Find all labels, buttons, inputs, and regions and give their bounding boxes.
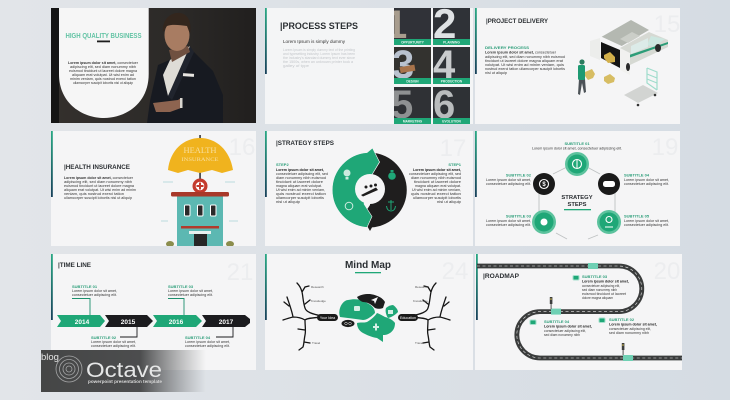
subtitle 04: [530, 319, 592, 337]
subtitle 05: consectetuer adipiscing elit.: [624, 223, 669, 227]
heading: project delivery: |PROJECT DELIVERY: [486, 18, 549, 25]
node 2: [533, 173, 555, 195]
subtitle 04: [185, 335, 230, 348]
panel: strategy steps (hexagon): [475, 131, 680, 246]
step tile 1: 1: [385, 3, 407, 47]
text block: step 1: Ut wisi enim ad minim veniam,: [412, 188, 461, 192]
subtitle 02: sed diam nonummy nibh: [609, 331, 649, 335]
text block: step 1: diam nonummy nibh euismod: [411, 176, 461, 180]
text block: intro: ullamcorper suscipit lobortis nisl ut aliquip: [73, 81, 133, 85]
center label: [561, 195, 593, 210]
node 3: [598, 173, 620, 195]
text block: health intro: veniam, quis nostrud exerci tation: [64, 192, 124, 196]
step tile 6: EVOLUTION: [442, 120, 461, 124]
accent bar: [265, 8, 267, 74]
left tree: Research: [311, 285, 324, 289]
heading: process steps: |PROCESS STEPS: [280, 21, 358, 31]
subtitle 01: [72, 284, 117, 297]
subtitle 03: Lorem ipsum dolor sit amet,: [486, 219, 531, 223]
step tile 1: OPPURTUNITY: [401, 40, 425, 44]
text block: intro: aliquam erat volutpat. Ut wisi enim ad: [72, 73, 134, 77]
subtitle 02: consectetuer adipiscing elit.: [91, 344, 136, 348]
panel: mind map: [265, 254, 473, 370]
text block: intro: euismod tincidunt ut laoreet dolore magna: [69, 69, 138, 73]
text block: step 2: diam nonummy nibh euismod: [276, 176, 326, 180]
subtitle 01: Lorem ipsum dolor sit amet, consectetuer adipiscing elit.: [532, 146, 622, 150]
accent bar: [475, 8, 477, 74]
slide number 20: 20: [654, 258, 680, 285]
text block: step 2: STEP2: [276, 162, 289, 167]
text block: step 2: tincidunt ut laoreet dolore: [276, 180, 323, 184]
tagline: powerpoint presentation template: [88, 379, 162, 385]
step tile 2: 2: [433, 0, 456, 47]
timeline arrows: 2015: [121, 319, 136, 326]
text block: step 2: magna aliquam erat volutpat.: [276, 184, 322, 188]
panel: strategy steps (circular): [265, 131, 473, 246]
text block: delivery process: Lorem ipsum dolor sit amet, consectetuer: [485, 50, 557, 54]
accent bar: [51, 131, 53, 197]
step tile 6: [433, 87, 470, 124]
text block: process intro: Lorem Ipsum is simply dummy: [283, 39, 346, 44]
subtitle 02: Lorem ipsum dolor sit amet,: [486, 178, 531, 182]
subtitle 04: Lorem ipsum dolor sit amet,: [624, 178, 669, 182]
text block: health intro: euismod tincidunt ut laoreet dolore magna: [64, 184, 135, 188]
subtitle 03: euismod tincidunt ut laoreet: [582, 292, 626, 296]
text block: delivery process: nisl ut aliquip: [485, 71, 507, 75]
subtitle 05: [624, 214, 669, 227]
text block: intro: [68, 61, 139, 85]
text block: step 1: [409, 162, 462, 204]
accent bar: [265, 131, 267, 197]
text block: delivery process: [485, 45, 565, 75]
subtitle 03: dolore magna aliquam: [582, 296, 613, 300]
heading: mind map: Mind Map: [345, 260, 391, 271]
timeline arrows: [57, 315, 250, 327]
text block: process intro: Lorem Ipsum is simply dummy text of the printing: [283, 48, 355, 52]
illustration: umbrella: [168, 135, 233, 185]
right tree: Travel: [415, 341, 424, 345]
text block: process intro: galley of type: [283, 64, 309, 68]
left tree: [283, 283, 338, 350]
illustration: delivery van: [590, 20, 668, 75]
text block: delivery process: nostrud exerci tation ullamcorper suscipit lobortis: [485, 67, 565, 71]
panel: high quality business: [51, 8, 256, 123]
panel: project delivery: [475, 8, 680, 124]
text block: process intro: and typesetting industry. Lorem Ipsum has been: [283, 52, 355, 56]
heading: health insurance: |HEALTH INSURANCE: [64, 164, 131, 171]
step tile 4: PRODUCTION: [441, 80, 463, 84]
hexagon connector: [539, 167, 615, 239]
subtitle 04: Lorem ipsum dolor sit amet,: [544, 324, 592, 328]
right tree: Knowledge: [413, 299, 428, 303]
text block: step 2: ullamcorper suscipit lobortis: [276, 196, 324, 200]
text block: health intro: aliquam erat volutpat. Ut wisi enim ad minim: [64, 188, 136, 192]
illustration: umbrella: INSURANCE: [182, 157, 219, 163]
left tree: Your Idea: [320, 316, 335, 320]
subtitle 03: [573, 274, 629, 300]
text block: intro: minim veniam, quis nostrud exerci tation: [70, 77, 136, 81]
subtitle 03: sed diam nonummy nibh: [582, 288, 617, 292]
step tile 4: 4: [433, 43, 456, 87]
subtitle 04: consectetuer adipiscing elit,: [544, 329, 586, 333]
subtitle 04: Lorem ipsum dolor sit amet,: [185, 340, 230, 344]
node 1: [565, 152, 589, 176]
step tile 4: [433, 47, 470, 84]
text block: health intro: ullamcorper suscipit lobortis nisl ut aliquip: [64, 196, 132, 200]
text block: step 2: Lorem ipsum dolor sit amet,: [276, 168, 324, 172]
connector lines: [72, 298, 184, 315]
text block: step 1: tincidunt ut laoreet dolore: [414, 180, 461, 184]
icon: compass: [345, 202, 353, 210]
text block: process intro: the 1500s, when an unknown printer took a: [283, 60, 353, 64]
accent bar: [51, 254, 53, 320]
panel: process steps: [265, 0, 473, 127]
watermark: octave logo banner: [41, 350, 206, 392]
subtitle 04: [624, 172, 669, 186]
text block: step 2: consectetuer adipiscing elit, sed: [276, 172, 328, 176]
text block: health intro: adipiscing elit, sed diam nonummy nibh: [64, 180, 132, 184]
timeline arrows: 2017: [219, 319, 234, 326]
label: blog: blog: [41, 352, 59, 363]
step tile 5: [394, 87, 431, 124]
panel: roadmap: [475, 254, 682, 370]
subtitle 01: Lorem ipsum dolor sit amet,: [72, 289, 117, 293]
subtitle 04: sed diam nonummy nibh: [544, 333, 580, 337]
slide number 15: 15: [654, 11, 680, 38]
text block: health intro: Lorem ipsum dolor sit amet, consectetuer: [64, 176, 134, 180]
heading: time line: |TIME LINE: [58, 263, 91, 269]
subtitle 02: SUBTITLE 02: [609, 317, 635, 322]
subtitle 03: consectetuer adipiscing elit.: [168, 293, 213, 297]
subtitle 04: consectetuer adipiscing elit.: [185, 344, 230, 348]
icon: light bulb: [344, 170, 350, 180]
subtitle 02: [486, 172, 532, 186]
left tree: Knowledge: [311, 299, 326, 303]
subtitle 03: SUBTITLE 03: [168, 284, 194, 289]
slide number 24: 24: [442, 258, 468, 285]
accent bar: [476, 254, 478, 320]
right tree: Education: [400, 316, 416, 320]
heading: strategy steps: |STRATEGY STEPS: [276, 140, 335, 147]
illustration: umbrella: HEALTH: [184, 146, 217, 155]
subtitle 04: SUBTITLE 04: [624, 172, 650, 178]
brain: [339, 294, 398, 342]
text block: step 1: ullamcorper suscipit lobortis: [413, 196, 461, 200]
panel: health insurance: [51, 131, 256, 248]
brand name: Octave: [86, 359, 162, 382]
slide number 19: 19: [652, 134, 678, 161]
subtitle 03: [486, 214, 532, 227]
traffic light 1: [550, 297, 552, 309]
step tile 6: 6: [433, 83, 455, 127]
subtitle 03: SUBTITLE 03: [582, 274, 608, 279]
subtitle 05: Lorem ipsum dolor sit amet,: [624, 219, 669, 223]
subtitle 05: SUBTITLE 05: [624, 214, 650, 218]
center label: STRATEGY: [561, 195, 593, 201]
chart: circular two-arrow diagram: [332, 148, 407, 231]
traffic light 2: [622, 343, 624, 355]
step tile 5: 5: [391, 83, 413, 127]
accent bar: [265, 254, 267, 320]
text block: step 2: [276, 162, 328, 204]
subtitle 02: Lorem ipsum dolor sit amet,: [91, 340, 136, 344]
step tile 2: PLANNING: [443, 40, 460, 44]
icon: money bag: [388, 170, 396, 180]
step tile 1: [394, 8, 431, 45]
right tree: [398, 283, 450, 350]
subtitle 04: consectetuer adipiscing elit.: [624, 182, 669, 186]
slide number 21: 21: [227, 259, 253, 286]
subtitle 03: Lorem ipsum dolor sit amet,: [582, 280, 629, 284]
step tile 3: [394, 47, 431, 84]
subtitle 01: SUBTITLE 01: [564, 141, 590, 146]
node 4: [532, 210, 556, 234]
text block: step 1: nisl ut aliquip: [437, 200, 461, 204]
text block: intro: adipiscing elit, sed diam nonummy nibh: [70, 65, 136, 69]
text block: health intro: [64, 176, 136, 200]
text block: intro: Lorem ipsum dolor sit amet, consectetuer: [68, 61, 139, 65]
text block: delivery process: tincidunt ut laoreet dolore magna aliquam erat: [485, 59, 563, 63]
text block: process intro: the industry's standard dummy text ever since: [283, 56, 355, 60]
illustration: hospital building: [161, 178, 238, 248]
illustration: courier with boxes: [578, 59, 615, 95]
slide number 17: 17: [440, 135, 466, 162]
text block: delivery process: DELIVERY PROCESS: [485, 45, 529, 50]
icon: anchor: [386, 200, 396, 211]
heading: roadmap: |ROADMAP: [483, 274, 519, 280]
slide number 16: 16: [229, 134, 255, 161]
step tile 3: DESIGN: [406, 80, 419, 84]
subtitle 03: SUBTITLE 03: [506, 214, 532, 218]
text block: step 1: consectetuer adipiscing elit, sed: [409, 172, 461, 176]
illustration: trolley: [624, 68, 658, 106]
subtitle 01: [532, 141, 622, 150]
subtitle 02: SUBTITLE 02: [91, 335, 117, 340]
text block: step 2: Ut wisi enim ad minim veniam,: [276, 188, 325, 192]
subtitle 02: consectetuer adipiscing elit,: [609, 327, 651, 331]
subtitle 03: [168, 284, 213, 297]
subtitle 04: SUBTITLE 04: [185, 335, 211, 340]
subtitle 03: Lorem ipsum dolor sit amet,: [168, 289, 213, 293]
step tile 5: MARKETING: [403, 120, 423, 124]
text block: step 1: STEP1: [448, 162, 462, 167]
text block: step 1: Lorem ipsum dolor sit amet,: [413, 168, 461, 172]
subtitle 02: [599, 317, 657, 335]
panel: time line: [51, 254, 256, 370]
step tile 3: 3: [392, 43, 414, 87]
subtitle 04: SUBTITLE 04: [544, 319, 570, 324]
text block: step 1: magna aliquam erat volutpat.: [415, 184, 461, 188]
node 2: $: [542, 182, 546, 188]
subtitle 03: consectetuer adipiscing elit.: [486, 223, 531, 227]
step tile 2: [433, 8, 470, 45]
subtitle 03: consectetuer adipiscing elit,: [582, 284, 620, 288]
accent bar: [475, 131, 477, 197]
subtitle 02: SUBTITLE 02: [506, 172, 532, 178]
white arch text panel: [59, 8, 149, 118]
text block: step 2: quis nostrud exerci tation: [276, 192, 326, 196]
subtitle 01: SUBTITLE 01: [72, 284, 98, 289]
subtitle 02: Lorem ipsum dolor sit amet,: [609, 322, 657, 326]
text block: step 2: nisl ut aliquip: [276, 200, 300, 204]
subtitle 02: [91, 335, 136, 348]
text block: process intro: [283, 39, 355, 68]
icon: concentric logo: [56, 356, 82, 382]
subtitle 02: consectetuer adipiscing elit.: [486, 182, 531, 186]
road: [477, 263, 682, 361]
timeline arrows: 2014: [75, 319, 90, 326]
heading: high quality business: HIGH QUALITY BUSINESS: [66, 33, 142, 40]
subtitle 01: consectetuer adipiscing elit.: [72, 293, 117, 297]
left tree: Travel: [312, 341, 321, 345]
center label: STEPS: [567, 202, 587, 208]
text block: delivery process: volutpat. Ut wisi enim ad minim veniam, quis: [485, 63, 564, 67]
text block: delivery process: adipiscing elit, sed diam nonummy nibh euismod: [485, 55, 565, 59]
timeline arrows: 2016: [169, 319, 184, 326]
right tree: Research: [415, 285, 428, 289]
icon: team: [361, 184, 378, 196]
node 5: [597, 210, 621, 234]
photo: businessman: [147, 13, 223, 123]
text block: step 1: quis nostrud exerci tation: [411, 192, 461, 196]
